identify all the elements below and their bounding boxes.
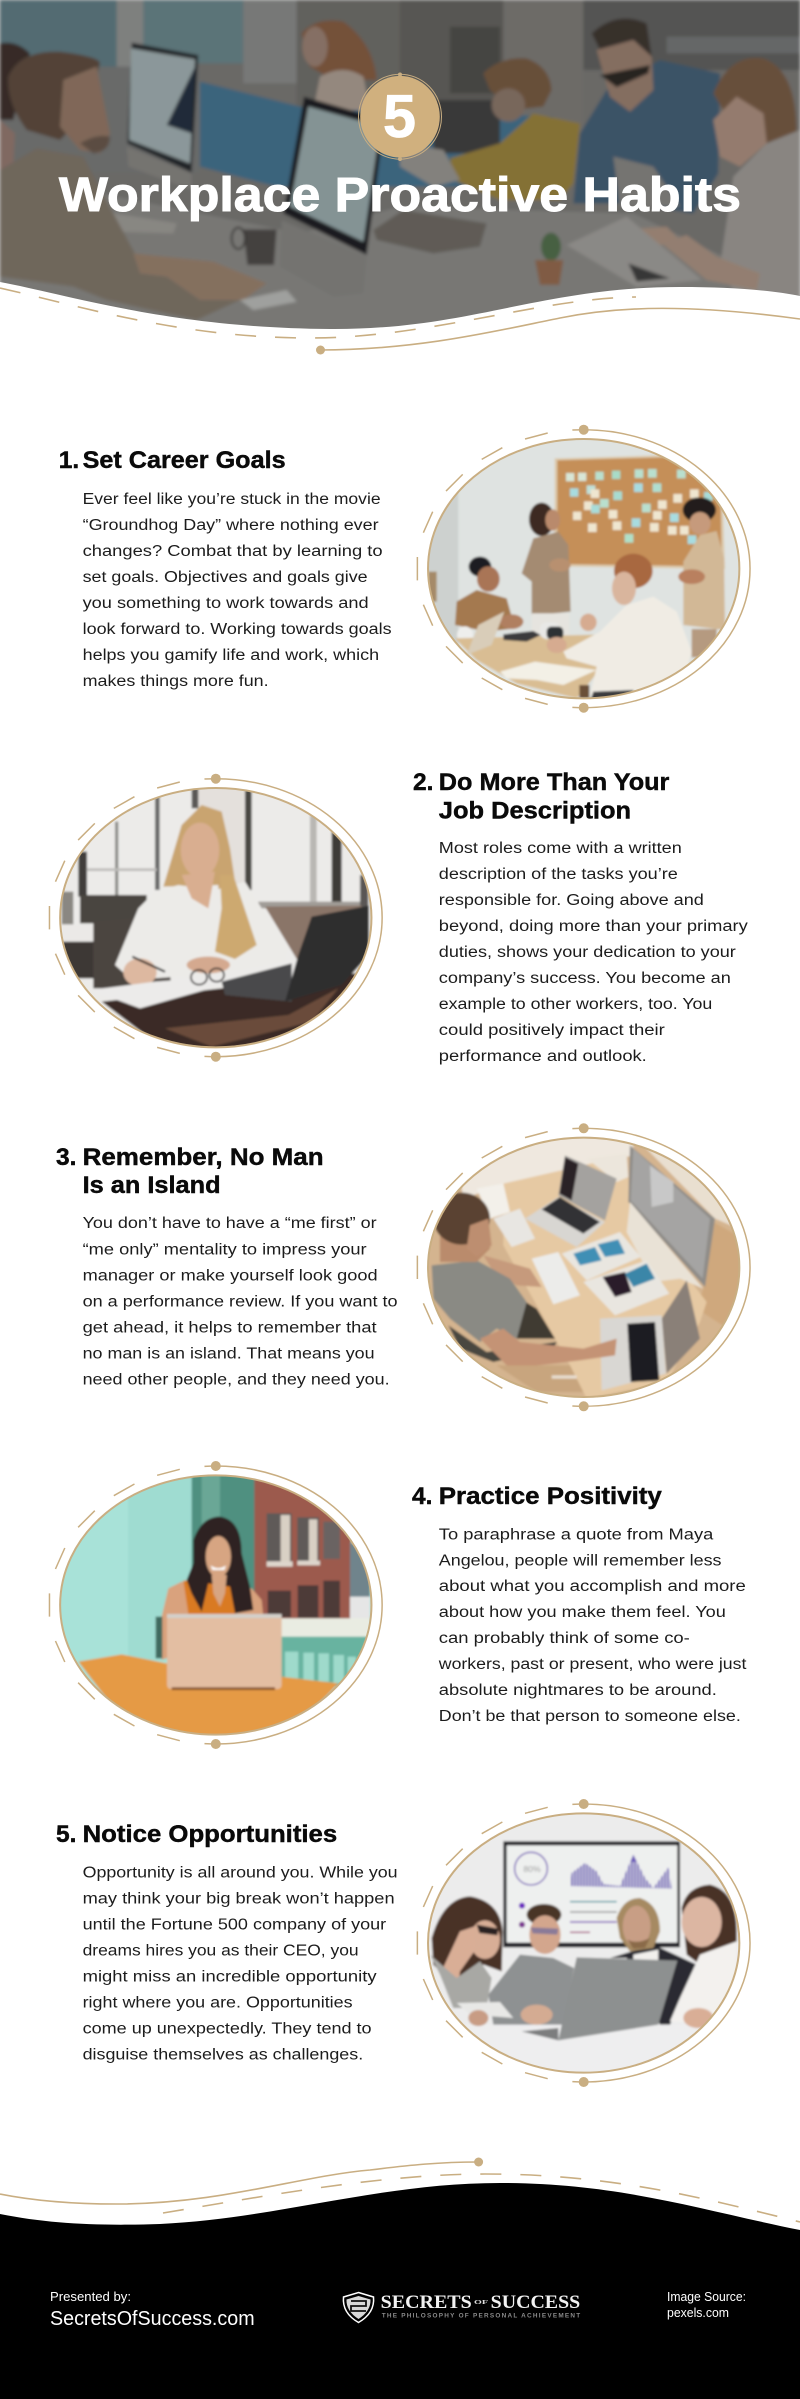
right woman <box>683 497 716 523</box>
body text 4: Don’t be that person to someone else. <box>439 1708 741 1725</box>
yellow woman <box>400 18 800 297</box>
body text 5: might miss an incredible opportunity <box>83 1968 377 1986</box>
ring 2 <box>49 774 382 1062</box>
woman <box>162 1582 263 1660</box>
body text 4: workers, past or present, who were just <box>438 1656 747 1673</box>
plant <box>541 233 561 261</box>
body text 3: “me only” mentality to impress your <box>83 1242 367 1258</box>
left man <box>0 43 30 120</box>
man 2 <box>488 1955 574 2025</box>
man <box>448 1325 557 1362</box>
heading 4: Practice Positivity <box>439 1483 662 1510</box>
woman <box>162 804 236 890</box>
body text 4: can probably think of some co- <box>439 1630 690 1647</box>
heading 2: Do More Than Your <box>439 769 670 796</box>
laptop 2 <box>662 1280 700 1374</box>
logo: Secrets of Success: SECRETS <box>381 2292 472 2313</box>
photo 5: team around laptop with chart screen: 80% <box>523 1864 541 1874</box>
body text 2: Most roles come with a written <box>439 840 682 857</box>
photo 2: woman with laptop <box>61 789 370 1046</box>
laptop <box>167 1614 282 1689</box>
heading 2: Job Description <box>439 798 631 824</box>
footer dashed gold line <box>163 2174 800 2222</box>
body text 5: right where you are. Opportunities <box>83 1994 353 2012</box>
blue panel <box>200 82 553 187</box>
heading 3: 3. <box>56 1144 76 1171</box>
heading 3 <box>56 1144 324 1199</box>
body text 4: To paraphrase a quote from Maya <box>439 1526 714 1544</box>
image source <box>667 2289 746 2320</box>
keyboards <box>493 1209 535 1247</box>
body text 5: come up unexpectedly. They tend to <box>83 2020 372 2038</box>
right woman <box>713 58 797 147</box>
section 3 <box>56 1144 398 1388</box>
body text 4: about how you make them feel. You <box>439 1604 726 1621</box>
monitor <box>628 1145 715 1287</box>
section 1 <box>59 447 392 690</box>
man 3 <box>610 1945 697 2025</box>
body text 2: responsible for. Going above and <box>439 892 704 909</box>
body text 3: get ahead, it helps to remember that <box>83 1320 377 1336</box>
table <box>455 634 607 698</box>
body text 2: example to other workers, too. You <box>439 996 712 1013</box>
heading 5: 5. <box>56 1821 76 1848</box>
body text 2: description of the tasks you’re <box>439 866 678 883</box>
heading 5: Notice Opportunities <box>83 1821 337 1848</box>
body text 2 <box>439 840 748 1065</box>
body text 2: beyond, doing more than your primary <box>439 918 748 935</box>
mug <box>243 229 277 265</box>
standing woman <box>529 503 554 536</box>
woman right <box>682 1885 737 1965</box>
body text 3 <box>83 1215 398 1388</box>
body text 3: no man is an island. That means you <box>83 1346 375 1362</box>
heading 1: Set Career Goals <box>83 447 286 474</box>
heading 3: Remember, No Man <box>83 1144 324 1171</box>
photo 1: team at corkboard <box>429 440 738 698</box>
body text 4 <box>438 1526 747 1725</box>
laptop 1 <box>592 1155 630 1182</box>
heading 1: 1. <box>59 447 79 474</box>
body text 3: on a performance review. If you want to <box>83 1294 398 1310</box>
right monitor <box>283 97 385 255</box>
icon: shield <box>343 2292 374 2322</box>
body text 4: about what you accomplish and more <box>439 1578 746 1595</box>
body text 2: could positively impact their <box>439 1022 665 1039</box>
laptop <box>522 2028 558 2040</box>
body text 2: duties, shows your dedication to your <box>439 944 736 961</box>
logo: Secrets of Success: SUCCESS <box>491 2292 580 2313</box>
body text 1: Ever feel like you’re stuck in the movie <box>83 491 381 508</box>
body text 1: look forward to. Working towards goals <box>83 621 392 638</box>
body text 1 <box>83 491 392 690</box>
desk <box>503 1155 707 1399</box>
presented by <box>50 2289 255 2330</box>
header: office photo with dark overlay <box>0 0 800 337</box>
section 4 <box>412 1483 747 1725</box>
heading 3: Is an Island <box>83 1172 221 1199</box>
heading 2 <box>413 769 670 824</box>
body text 5: may think your big break won’t happen <box>83 1890 395 1908</box>
body text 2: performance and outlook. <box>439 1048 647 1065</box>
body text 1: “Groundhog Day” where nothing ever <box>83 517 379 534</box>
photo 3: man at desk from above <box>429 1138 738 1396</box>
body text 1: you something to work towards and <box>83 595 369 612</box>
ring 4 <box>49 1461 382 1749</box>
body text 4: absolute nightmares to be around. <box>439 1682 717 1699</box>
header dashed gold line <box>0 288 636 338</box>
ring 1 <box>417 425 750 713</box>
photo 4: smiling woman with laptop <box>61 1476 370 1734</box>
books <box>562 1232 641 1280</box>
presented by: SecretsOfSuccess.com <box>50 2308 255 2330</box>
heading 4: 4. <box>412 1483 432 1510</box>
logo: Secrets of Success: OF <box>474 2299 488 2306</box>
blue sweater man <box>573 60 720 213</box>
header dark overlay <box>0 0 800 337</box>
footer wave: black panel <box>0 2183 800 2399</box>
man from behind <box>614 554 653 588</box>
basket <box>373 210 487 253</box>
table <box>78 1654 338 1740</box>
body text 3: manager or make yourself look good <box>83 1268 378 1284</box>
section 5 <box>56 1821 398 2064</box>
header solid gold line with dot <box>316 308 800 354</box>
logo: Secrets of Success <box>343 2292 580 2322</box>
body text 3: need other people, and they need you. <box>83 1372 390 1388</box>
seated man <box>469 557 491 577</box>
body text 5: dreams hires you as their CEO, you <box>83 1942 359 1960</box>
footer solid gold line with dot <box>0 2158 483 2204</box>
title: Workplace Proactive Habits <box>59 168 741 222</box>
ring 3 <box>417 1123 750 1411</box>
left monitor <box>127 43 198 173</box>
body text 5 <box>83 1864 398 2064</box>
laptop <box>222 963 292 1002</box>
body text 1: changes? Combat that by learning to <box>83 543 383 560</box>
logo: Secrets of Success: THE PHILOSOPHY OF PERSONAL ACHIEVEMENT <box>382 2313 580 2320</box>
centre woman <box>302 21 377 80</box>
woman left <box>432 1896 503 1985</box>
body text 5: disguise themselves as challenges. <box>83 2046 363 2064</box>
number badge: 5 <box>383 83 416 150</box>
body text 4: Angelou, people will remember less <box>439 1552 722 1570</box>
image source: pexels.com <box>667 2305 729 2320</box>
body text 1: set goals. Objectives and goals give <box>83 569 368 586</box>
body text 1: makes things more fun. <box>83 673 269 690</box>
body text 1: helps you gamify life and work, which <box>83 647 379 664</box>
body text 3: You don’t have to have a “me first” or <box>83 1215 377 1232</box>
section 2 <box>413 769 748 1065</box>
desk <box>0 187 800 337</box>
image source: Image Source: <box>667 2289 746 2304</box>
body text 5: until the Fortune 500 company of your <box>83 1916 386 1934</box>
table <box>420 2025 760 2091</box>
body text 5: Opportunity is all around you. While you <box>83 1864 398 1882</box>
presented by: Presented by: <box>50 2289 131 2304</box>
header wave: white curve <box>0 282 800 400</box>
table <box>101 972 356 1046</box>
laptop <box>567 217 702 287</box>
heading 2: 2. <box>413 769 433 796</box>
number badge <box>358 72 442 161</box>
body text 2: company’s success. You become an <box>439 970 731 987</box>
ring 5 <box>417 1799 750 2087</box>
photo 5: team around laptop with chart screen <box>429 1814 738 2072</box>
